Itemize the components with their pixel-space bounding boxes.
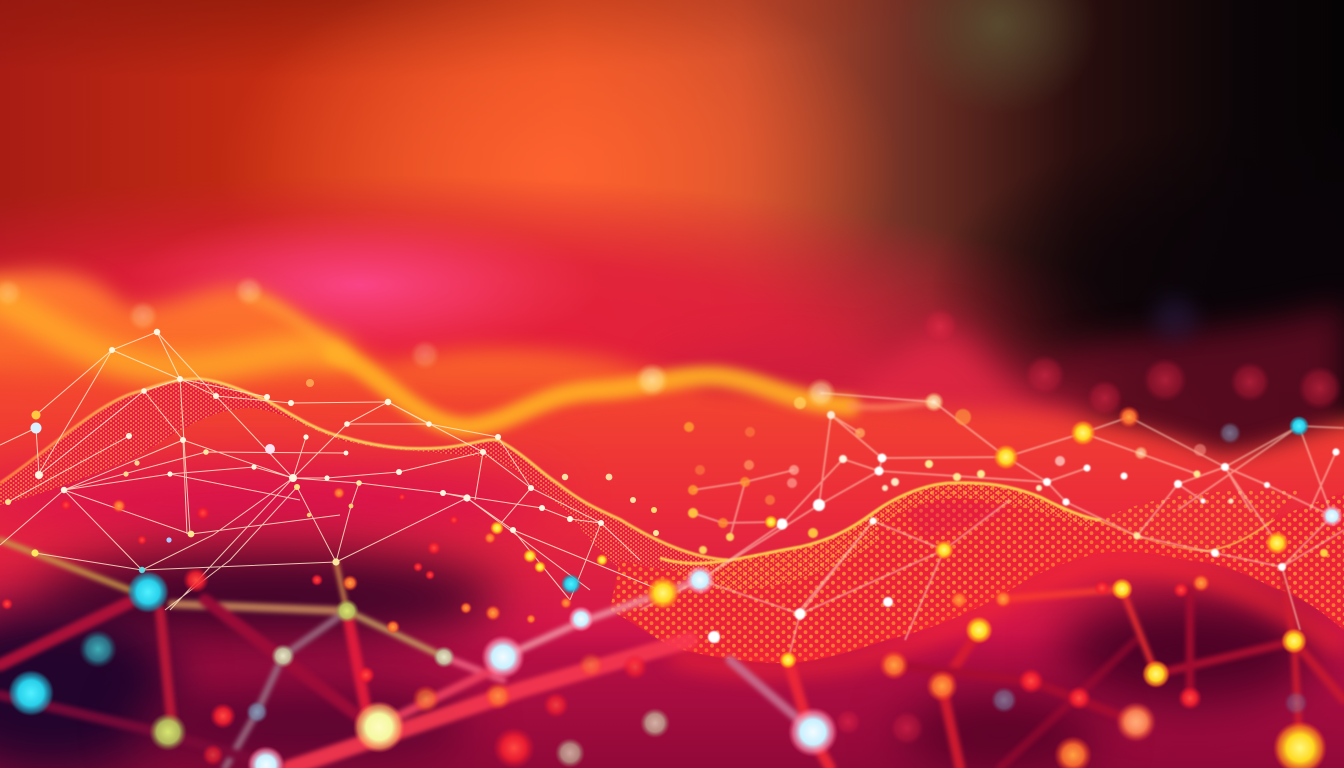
thin mesh lines, left cluster [0, 332, 660, 610]
small bright nodes, left [5, 329, 659, 573]
large foreground bokeh lights, left [8, 571, 670, 768]
small bright nodes, right [708, 411, 1340, 643]
background wave: orange left hills [0, 271, 700, 520]
large foreground bokeh lights, right [779, 574, 1327, 768]
blurred thick network edges in the foreground [0, 540, 1344, 768]
small orange lights on the middle body [684, 397, 1206, 554]
small red and orange lights, left field [1, 487, 608, 634]
wave: left ribbon [0, 379, 728, 600]
lower field: crimson body of the mesh [0, 372, 1344, 768]
background wave: distant red hills [660, 305, 1344, 470]
glowing mid nodes [0, 276, 1343, 610]
yellow glowing ribbon [0, 296, 934, 427]
dark voids [0, 550, 1320, 768]
thin mesh lines, right cluster [640, 393, 1344, 660]
wave: centre and right ribbon [610, 483, 1344, 663]
soft red underglow of ribbon [672, 561, 1344, 668]
front dotted wave surface [0, 379, 1344, 668]
